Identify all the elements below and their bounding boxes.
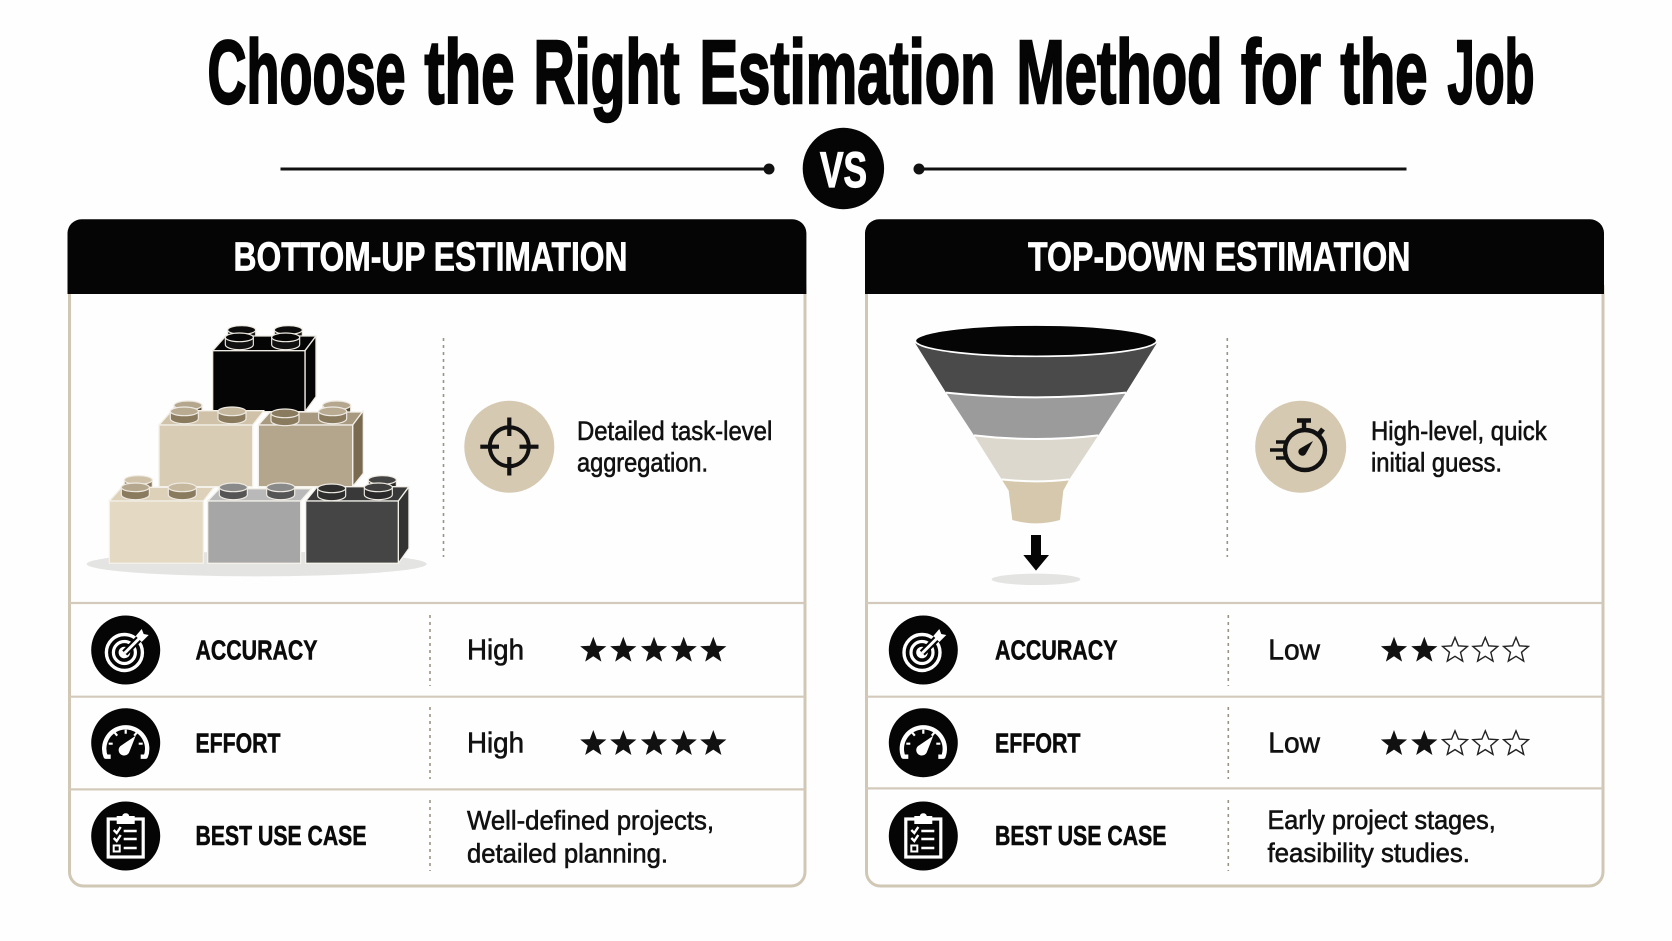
row: accuracy: High (467, 634, 524, 666)
row: accuracy (91, 616, 726, 684)
row: best use case: BEST USE CASE (995, 820, 1166, 851)
panel: top-down estimation (865, 219, 1604, 886)
row: best use case: detailed planning. (467, 838, 668, 868)
row: effort: EFFORT (196, 727, 280, 758)
row: effort (889, 708, 1528, 777)
row: effort (91, 708, 726, 777)
row: effort: EFFORT (995, 727, 1080, 758)
row: accuracy: Low (1268, 634, 1321, 666)
icon: crosshair (464, 401, 554, 493)
title: the (424, 23, 514, 123)
title: Choose (208, 23, 406, 123)
icon: stopwatch (1255, 401, 1346, 493)
panel header: top-down: TOP-DOWN ESTIMATION (1028, 234, 1410, 280)
title: for (1241, 23, 1321, 123)
title: Estimation (700, 23, 996, 123)
row: best use case: feasibility studies. (1268, 838, 1470, 868)
row: best use case: Early project stages, (1268, 805, 1496, 835)
row: effort: High (467, 728, 524, 760)
description: bottom-up (577, 416, 772, 478)
row: effort: Low (1268, 728, 1321, 760)
title: Right (534, 23, 680, 123)
description: top-down (1371, 416, 1547, 478)
row: best use case: BEST USE CASE (196, 820, 366, 851)
title (208, 23, 1534, 123)
panel: bottom-up estimation (68, 219, 806, 886)
row: best use case: Well-defined projects, (467, 805, 714, 835)
description: bottom-up: aggregation. (577, 448, 708, 478)
title: Job (1448, 23, 1534, 123)
VS divider: VS (820, 142, 867, 198)
panel header: bottom-up (68, 219, 806, 294)
illustration: stacked bricks (87, 326, 427, 576)
row: accuracy: ACCURACY (196, 634, 318, 666)
panel header: top-down (865, 219, 1604, 294)
row: accuracy (889, 616, 1528, 684)
description: bottom-up: Detailed task-level (577, 416, 772, 446)
row: best use case (889, 802, 1496, 870)
illustration: funnel with arrow (915, 325, 1157, 585)
panel header: bottom-up: BOTTOM-UP ESTIMATION (234, 234, 628, 280)
VS divider (280, 128, 1406, 209)
description: top-down: High-level, quick (1371, 416, 1547, 446)
row: best use case (91, 802, 714, 870)
row: accuracy: ACCURACY (995, 634, 1118, 666)
title: Method (1016, 23, 1222, 123)
title: the (1340, 23, 1428, 123)
description: top-down: initial guess. (1371, 448, 1502, 478)
